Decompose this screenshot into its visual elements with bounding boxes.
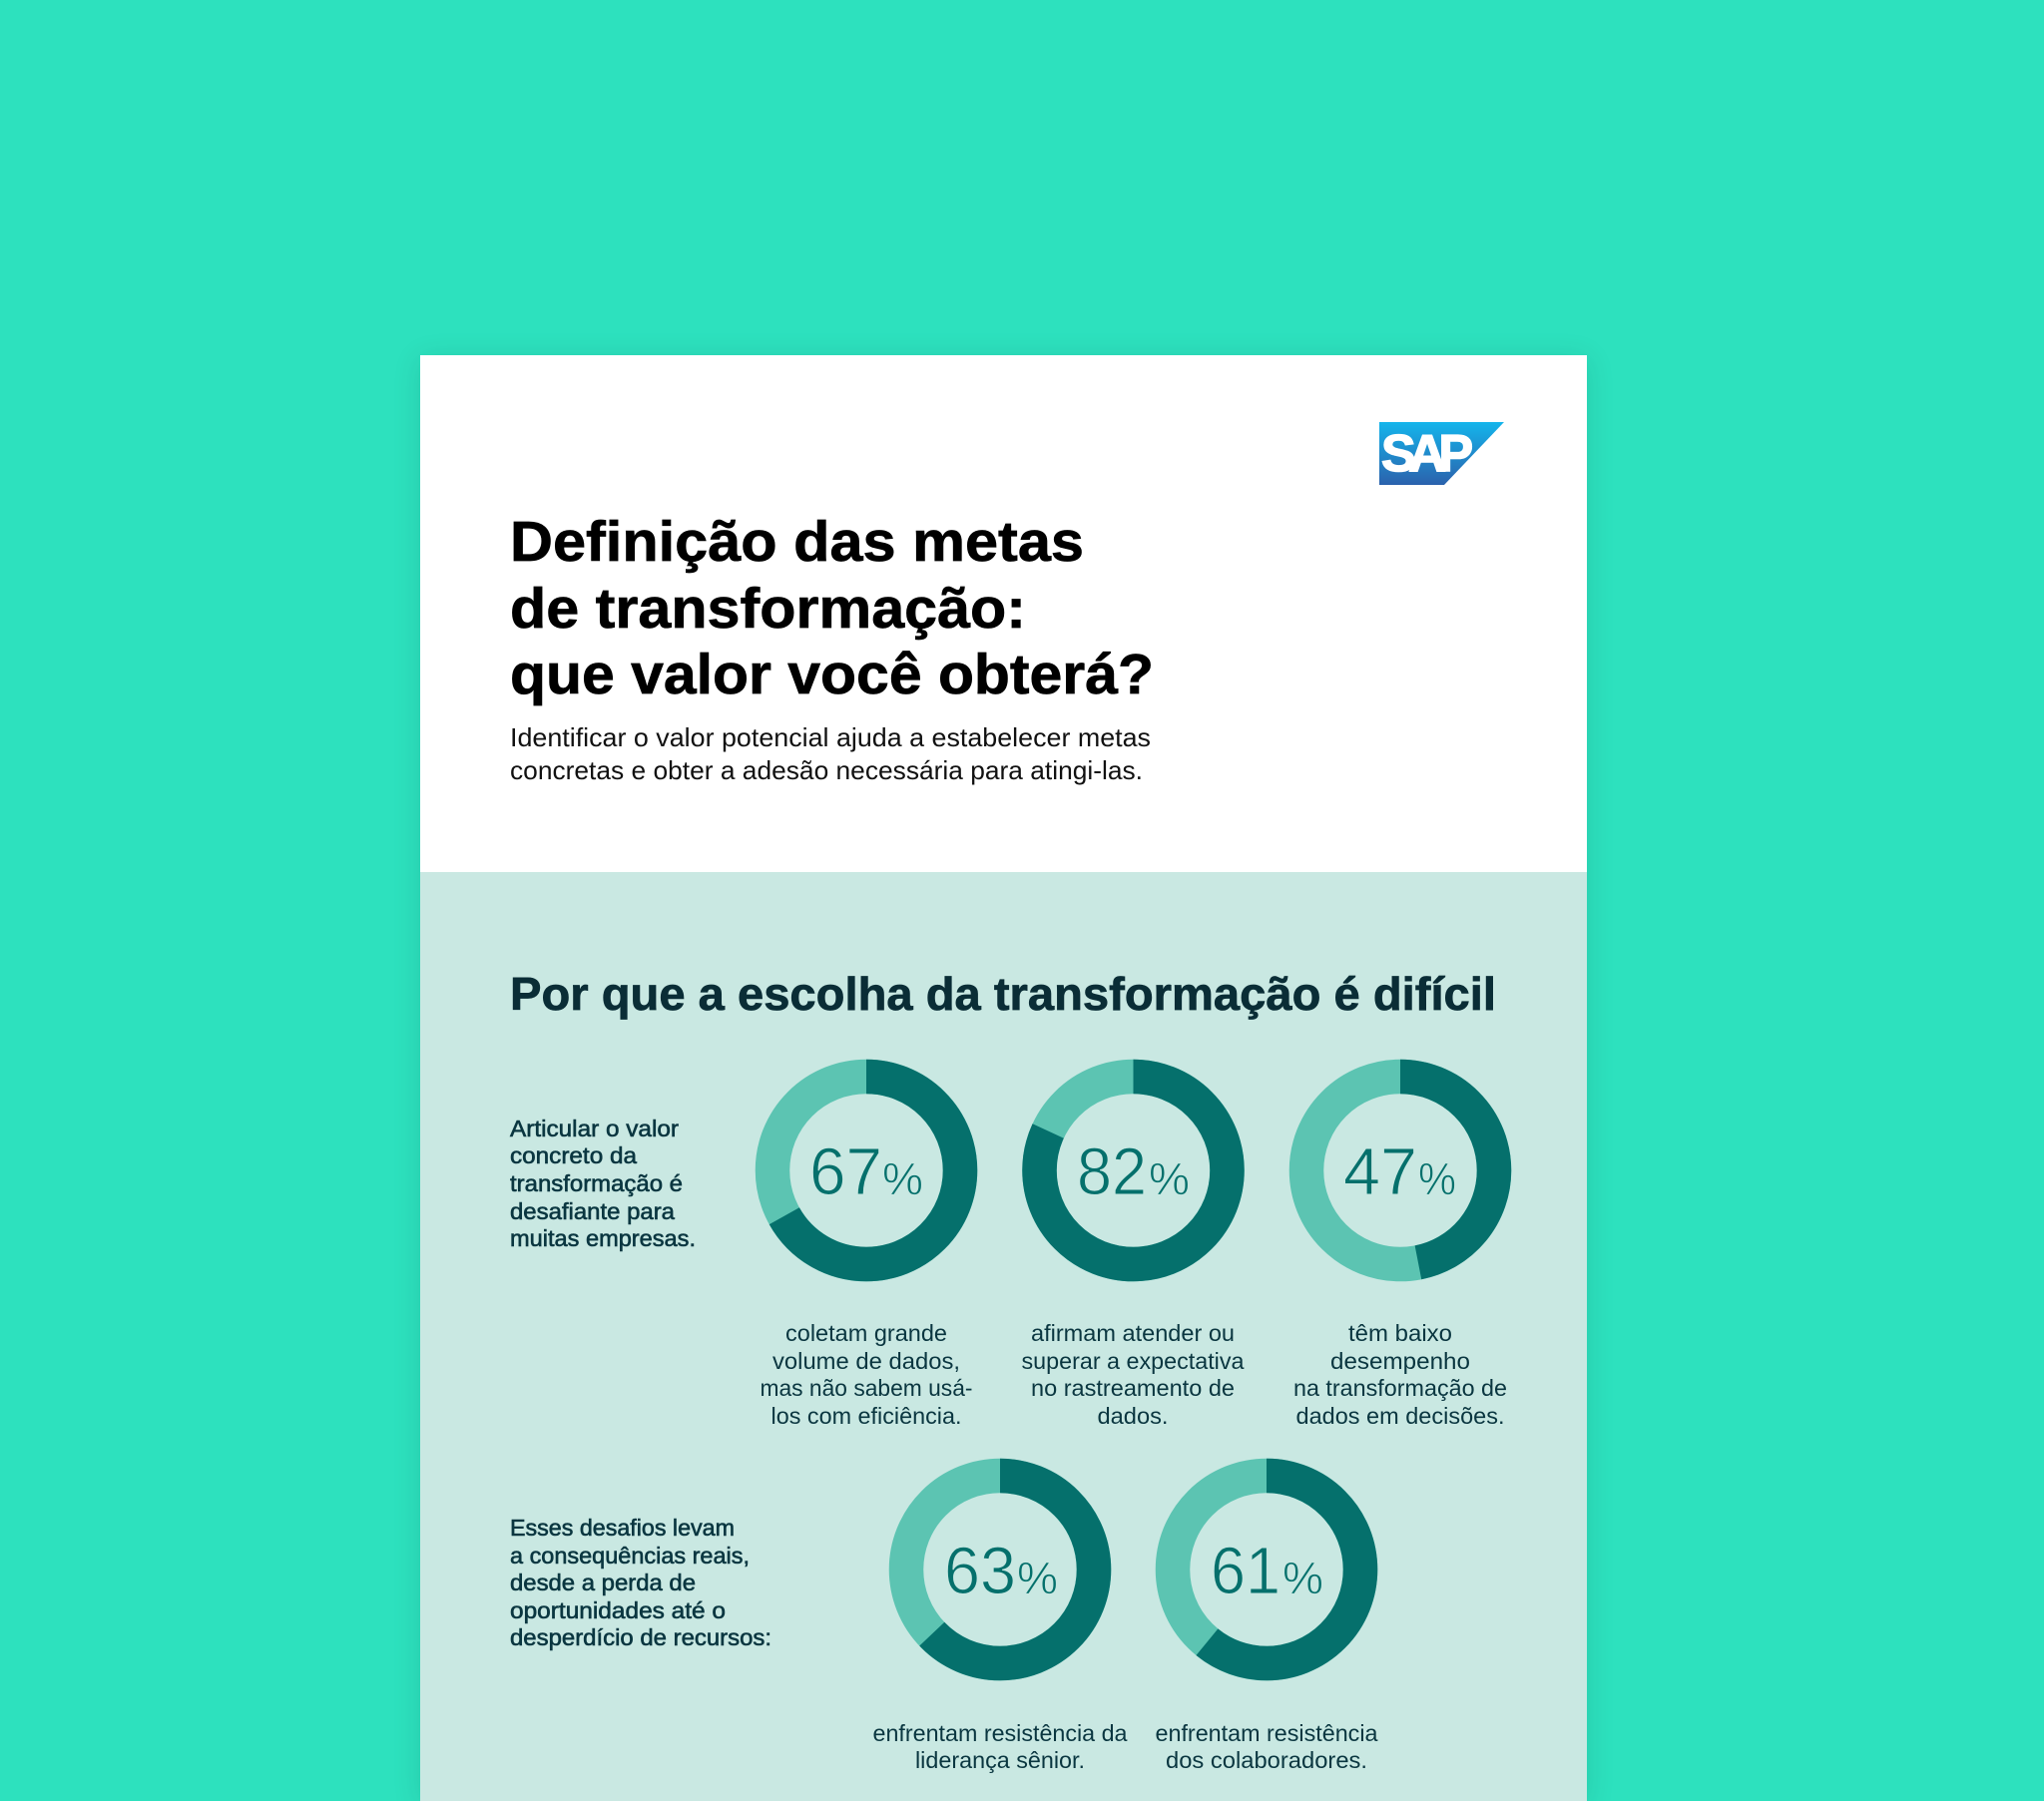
row 1 label: concreto da [510,1142,637,1168]
caption: 67%: volume de dados, [772,1348,960,1374]
donut chart: 67% [772,1077,960,1264]
subtitle [510,722,1151,785]
donut chart: 63%: % [1017,1553,1058,1603]
donut chart: 82% [1040,1077,1228,1264]
panel: mint section [420,872,1587,1801]
section heading: Por que a escolha da transformação é difícil [510,968,1496,1020]
SAP logo: SAP [1381,425,1473,483]
row 2 label: oportunidades até o [510,1597,726,1623]
row 2 label: desde a perda de [510,1570,696,1595]
SAP logo [1379,422,1504,485]
caption: 47%: desempenho [1330,1348,1470,1374]
donut chart: 63%: 63 [944,1534,1016,1608]
card shadow [420,355,1587,1801]
donut chart: 63% [906,1476,1094,1663]
caption: 82%: afirmam atender ou [1031,1320,1235,1346]
donut chart: 67%: % [882,1153,923,1204]
title [510,510,1154,706]
caption: 63% [872,1720,1128,1773]
title: de transformação: [510,577,1026,641]
caption: 67%: coletam grande [785,1320,947,1346]
donut chart: 47%: % [1418,1153,1456,1204]
caption: 61%: dos colaboradores. [1166,1747,1367,1773]
caption: 61%: enfrentam resistência [1156,1720,1378,1746]
title: que valor você obterá? [510,643,1154,706]
caption: 47% [1293,1320,1507,1429]
caption: 47%: na transformação de [1293,1375,1507,1401]
caption: 67%: mas não sabem usá- [761,1375,972,1401]
donut chart: 67%: 67 [809,1134,882,1209]
caption: 67% [761,1320,972,1429]
row 2 label: desperdício de recursos: [510,1624,771,1650]
caption: 82%: dados. [1098,1403,1168,1429]
row 2 label: Esses desafios levam [510,1515,735,1541]
row 1 label: muitas empresas. [510,1225,696,1251]
donut chart: 61%: % [1282,1553,1323,1603]
subtitle: Identificar o valor potencial ajuda a estabelecer metas [510,722,1151,752]
row 2 label [510,1515,771,1650]
title: Definição das metas [510,510,1084,574]
panel: white header [420,355,1587,872]
donut chart: 47% [1306,1077,1494,1264]
donut chart: 82%: % [1149,1153,1190,1204]
row 1 label: desafiante para [510,1198,675,1224]
caption: 63%: enfrentam resistência da [872,1720,1128,1746]
subtitle: concretas e obter a adesão necessária para atingi-las. [510,755,1143,785]
row 1 label [510,1116,696,1251]
caption: 47%: dados em decisões. [1295,1403,1505,1429]
row 1 label: Articular o valor [510,1116,679,1141]
row 1 label: transformação é [510,1170,683,1196]
caption: 82%: superar a expectativa [1022,1348,1245,1374]
donut chart: 82%: 82 [1077,1134,1147,1209]
donut chart: 61% [1173,1476,1360,1663]
donut chart: 61%: 61 [1211,1534,1280,1608]
caption: 67%: los com eficiência. [770,1403,962,1429]
caption: 61% [1156,1720,1378,1773]
row 2 label: a consequências reais, [510,1543,750,1569]
caption: 82%: no rastreamento de [1031,1375,1235,1401]
caption: 47%: têm baixo [1348,1320,1452,1346]
donut chart: 47%: 47 [1343,1134,1417,1209]
caption: 63%: liderança sênior. [915,1747,1085,1773]
caption: 82% [1022,1320,1245,1429]
